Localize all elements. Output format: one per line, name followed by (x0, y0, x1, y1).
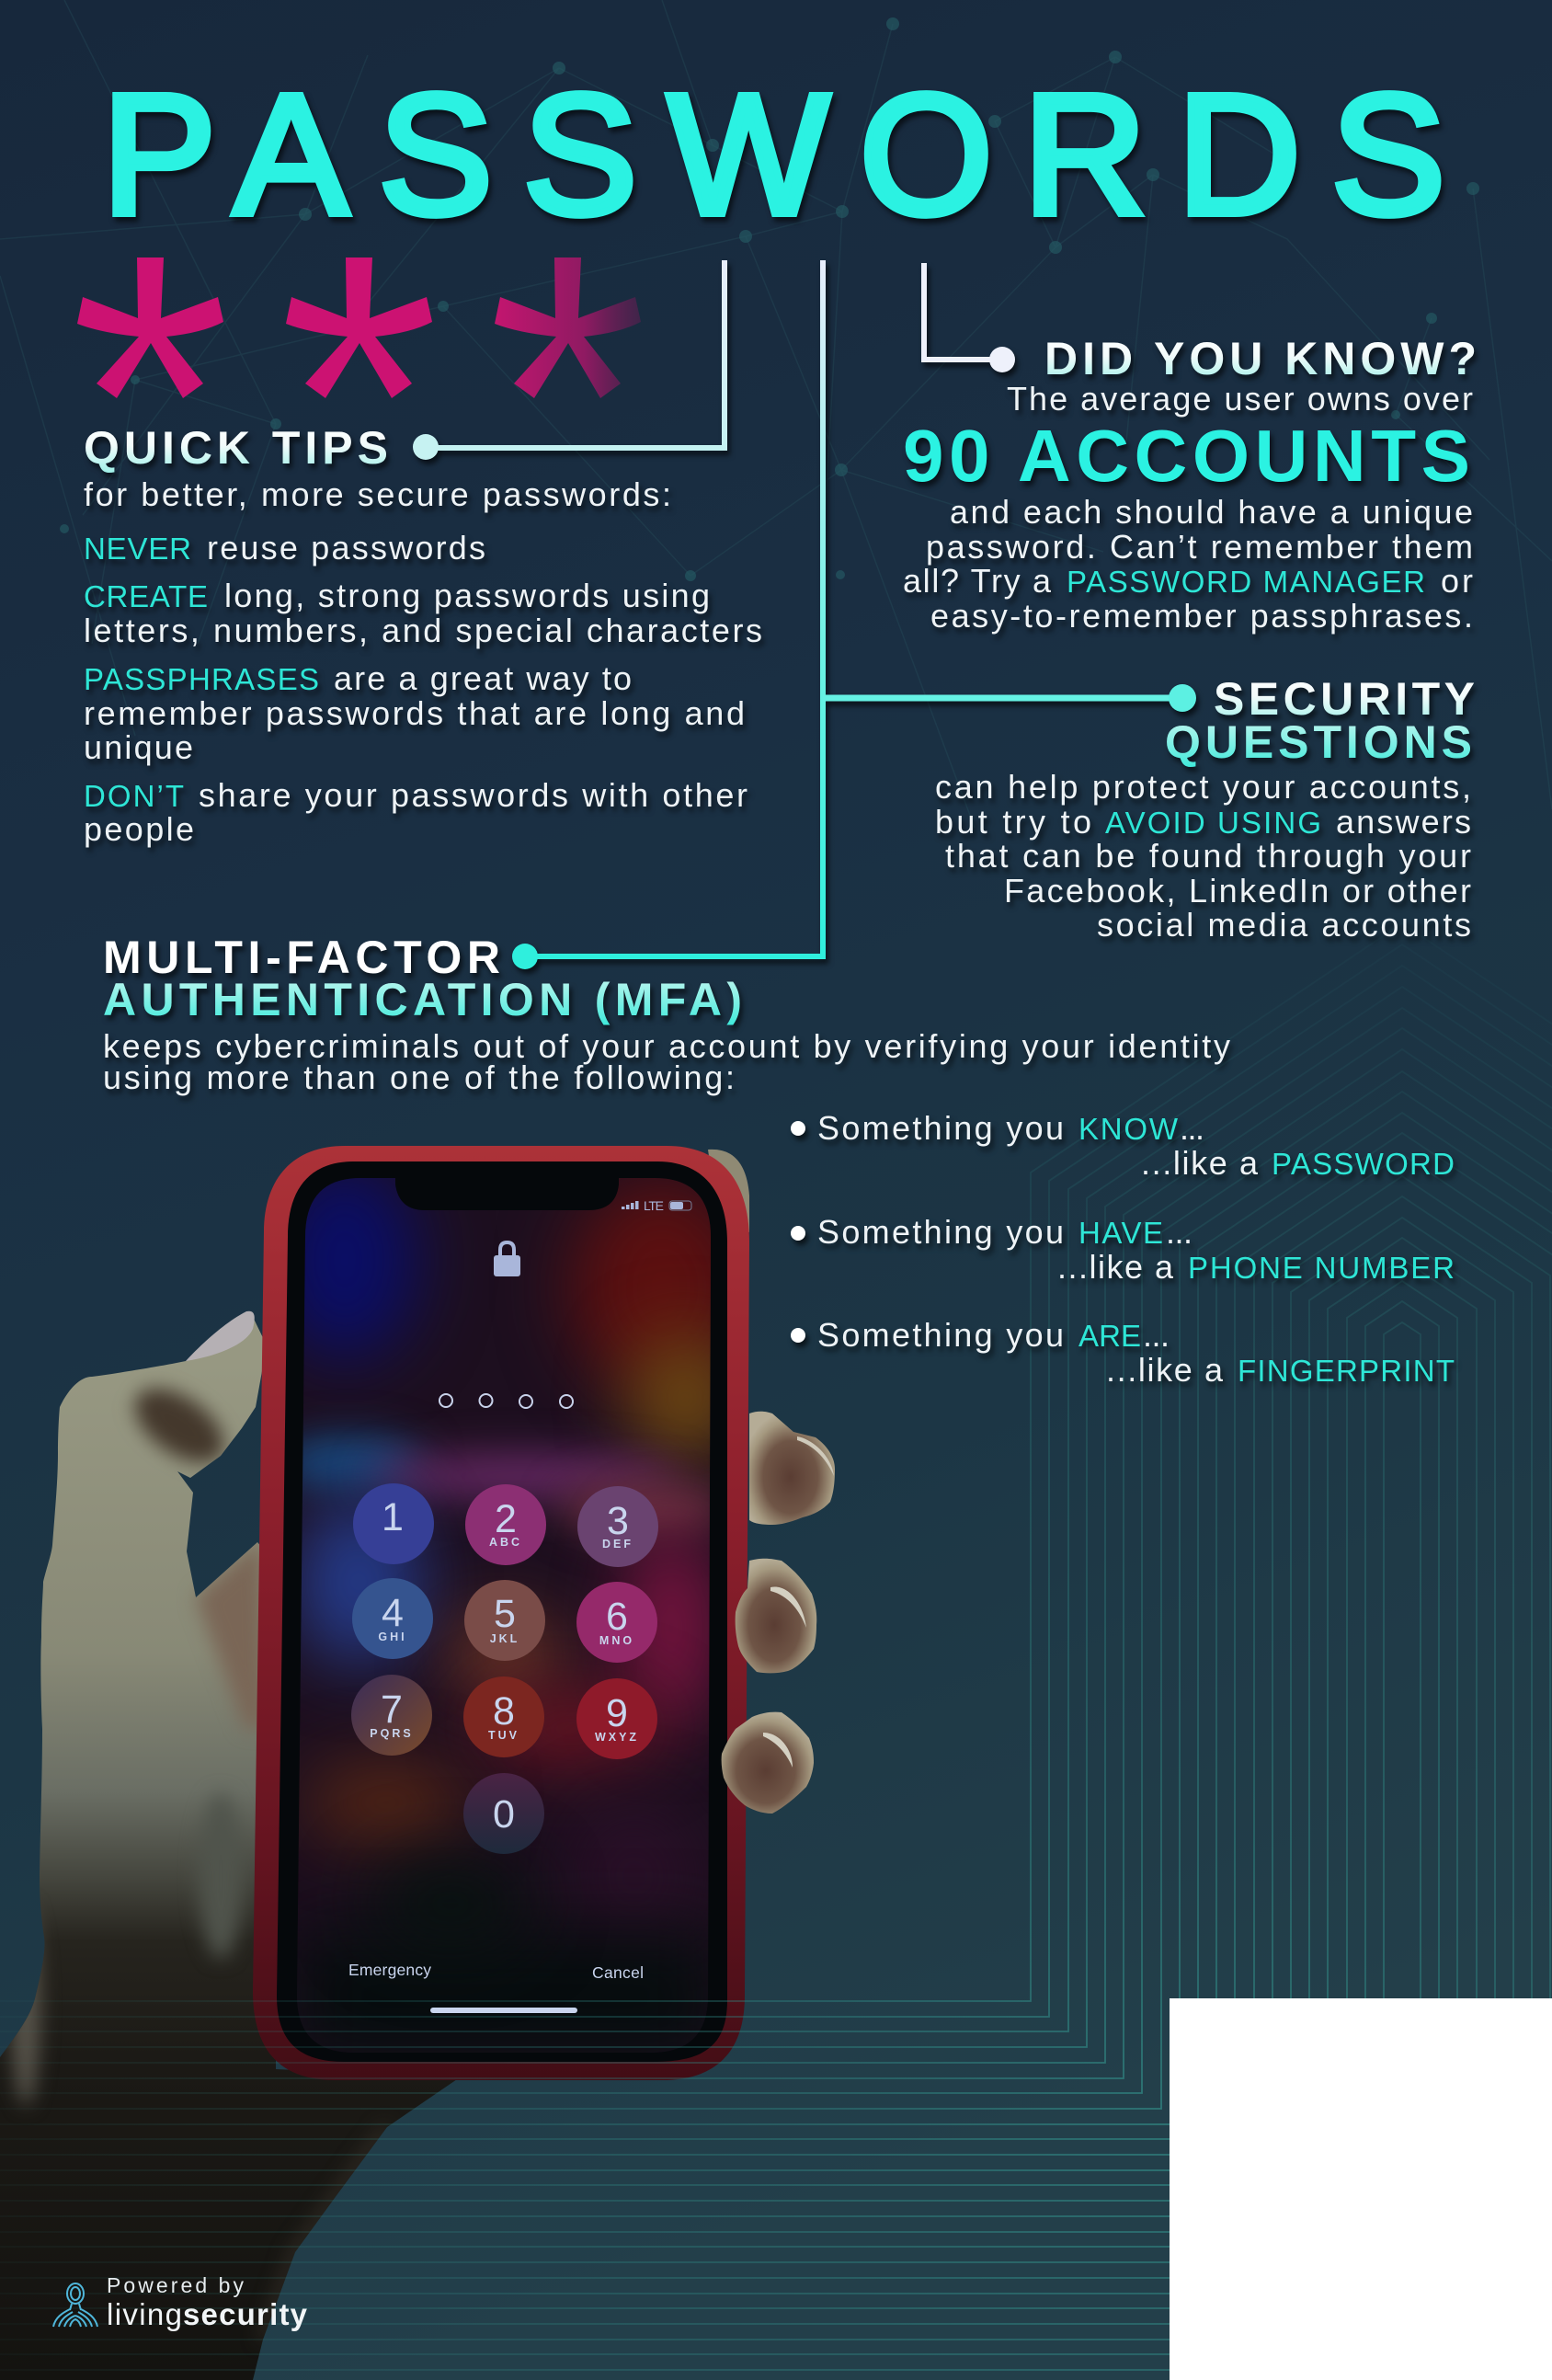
finger three nail (763, 1733, 793, 1768)
keypad: 8 (493, 1689, 515, 1734)
keypad: 0 (493, 1792, 515, 1836)
MFA intro: using more than one of the following: (103, 1058, 735, 1096)
finger one nail (797, 1436, 834, 1476)
tip: do not share: DON’T (84, 779, 184, 813)
tip: create: letters, numbers, and special characters (84, 612, 762, 649)
did you know body: easy-to-remember passphrases. (930, 597, 1473, 635)
finger two (736, 1559, 816, 1673)
did you know body: all? Try a (903, 562, 1052, 600)
tip: do not share (84, 776, 747, 848)
did you know body: or (1441, 562, 1473, 600)
title: PASSWORDS (102, 60, 1445, 250)
keypad: TUV (488, 1729, 519, 1742)
connector: security and MFA (512, 260, 1196, 969)
keypad: 1 (382, 1495, 404, 1539)
security body: that can be found through your (945, 837, 1471, 875)
factor: are: ...like a (1106, 1351, 1224, 1389)
did you know body: PASSWORD MANAGER (1067, 565, 1425, 599)
stat: 90 accounts: 90 ACCOUNTS (903, 415, 1470, 497)
keypad: 7 (381, 1688, 403, 1732)
cancel button: Cancel (592, 1963, 644, 1982)
factor: have: PHONE NUMBER (1188, 1251, 1455, 1285)
keypad: 6 (606, 1595, 628, 1639)
heading: security questions: QUESTIONS (1165, 716, 1472, 768)
status bar (622, 1198, 691, 1213)
tip: passphrases: PASSPHRASES (84, 662, 319, 696)
factor: are: ARE (1078, 1319, 1141, 1353)
factor: have (791, 1213, 1455, 1286)
keypad: 5 (494, 1592, 516, 1636)
did you know body: and each should have a unique (950, 493, 1473, 531)
home bar (430, 2008, 577, 2013)
security body: but try to (935, 803, 1091, 841)
heading: quick tips: QUICK TIPS (84, 422, 388, 474)
finger one (749, 1412, 835, 1525)
thumb nail (186, 1311, 255, 1361)
keypad: PQRS (370, 1727, 414, 1740)
top finger (708, 1150, 749, 1232)
asterisk one (77, 257, 223, 398)
fingers (722, 1412, 835, 1814)
tip: create: long, strong passwords using (224, 577, 710, 614)
keypad: JKL (490, 1632, 519, 1645)
phone bezel (277, 1161, 727, 2062)
logo: living security (53, 2273, 308, 2331)
keypad: 9 (606, 1691, 628, 1735)
heading: MFA: MULTI-FACTOR (103, 932, 500, 983)
keypad: 4 (382, 1591, 404, 1635)
panel: quick tips (84, 422, 762, 848)
emergency button: Emergency (348, 1961, 431, 1979)
finger three (722, 1712, 814, 1814)
hand (0, 1150, 749, 2380)
connector: did you know (924, 263, 1015, 372)
factor: know: ... (1180, 1109, 1204, 1147)
tip: passphrases (84, 659, 745, 766)
tip: do not share: share your passwords with other (199, 776, 747, 814)
panel: security questions (935, 673, 1475, 944)
tip: passphrases: remember passwords that are long and (84, 694, 745, 732)
MFA intro: keeps cybercriminals out of your account by verifying your identity (103, 1027, 1230, 1065)
asterisk two (286, 257, 432, 398)
passcode dots (439, 1394, 573, 1408)
asterisk three (495, 257, 641, 398)
heading: did you know: DID YOU KNOW? (1044, 333, 1477, 384)
status bar: LTE (644, 1198, 664, 1213)
phone case (253, 1146, 749, 2080)
wordmark: security: security (183, 2297, 308, 2331)
keypad: WXYZ (595, 1731, 639, 1744)
factor: know: Something you (817, 1109, 1064, 1147)
tip: create (84, 577, 762, 649)
factor: have: ... (1166, 1213, 1193, 1251)
keypad: 3 (607, 1499, 629, 1543)
quick tips intro: for better, more secure passwords: (84, 475, 671, 513)
factor: have: ...like a (1057, 1248, 1174, 1286)
lock icon (494, 1242, 520, 1276)
security body: social media accounts (1097, 906, 1471, 944)
tip: never: reuse passwords (207, 529, 485, 566)
circuit line pattern (0, 923, 1552, 2380)
notch (395, 1168, 619, 1210)
tip: passphrases: are a great way to (334, 659, 632, 697)
icon: fingerprint person (53, 2283, 97, 2327)
security body: answers (1336, 803, 1471, 841)
wordmark: living: living (107, 2297, 182, 2331)
factor: know: ...like a (1141, 1144, 1259, 1182)
panel: multi-factor authentication (103, 932, 1455, 1389)
asterisks (77, 257, 641, 398)
factor: are (791, 1316, 1455, 1389)
keypad: MNO (599, 1634, 634, 1647)
tip: never: NEVER (84, 532, 191, 566)
MFA intro (103, 1027, 1230, 1096)
heading: MFA (103, 932, 742, 1025)
security body: can help protect your accounts, (935, 768, 1471, 806)
keypad (351, 1483, 658, 1854)
tip: do not share: people (84, 810, 194, 848)
factor: know (791, 1109, 1455, 1182)
factor: know: PASSWORD (1272, 1147, 1455, 1181)
did you know body (903, 493, 1473, 635)
heading: security questions (1165, 673, 1475, 768)
phone screen (297, 1178, 711, 2053)
factor: are: ... (1143, 1316, 1170, 1354)
network nodes (60, 17, 1479, 581)
factor: are: FINGERPRINT (1238, 1354, 1455, 1388)
keypad: 2 (495, 1497, 517, 1541)
keypad: DEF (602, 1538, 633, 1550)
keypad: ABC (489, 1536, 522, 1549)
factor: have: HAVE (1078, 1216, 1163, 1250)
tip: never (84, 529, 485, 566)
security body: AVOID USING (1105, 806, 1321, 840)
lead-in: The average user owns over (1007, 380, 1473, 418)
factor: know: KNOW (1078, 1112, 1179, 1146)
heading: MFA: AUTHENTICATION (MFA) (103, 974, 742, 1025)
powered by: Powered by (107, 2273, 245, 2297)
factor: are: Something you (817, 1316, 1064, 1354)
heading: security questions: SECURITY (1214, 673, 1475, 725)
network background (0, 0, 1552, 828)
tip: passphrases: unique (84, 728, 193, 766)
did you know body: password. Can’t remember them (926, 528, 1473, 566)
security body: Facebook, LinkedIn or other (1004, 872, 1471, 910)
factor: have: Something you (817, 1213, 1064, 1251)
finger two nail (770, 1587, 806, 1628)
phone (253, 1146, 754, 2080)
security body (935, 768, 1471, 944)
connector: quick tips (413, 260, 725, 460)
panel: did you know (903, 333, 1477, 635)
tip: create: CREATE (84, 579, 208, 613)
white corner block (1170, 1998, 1552, 2380)
keypad: GHI (378, 1631, 407, 1643)
